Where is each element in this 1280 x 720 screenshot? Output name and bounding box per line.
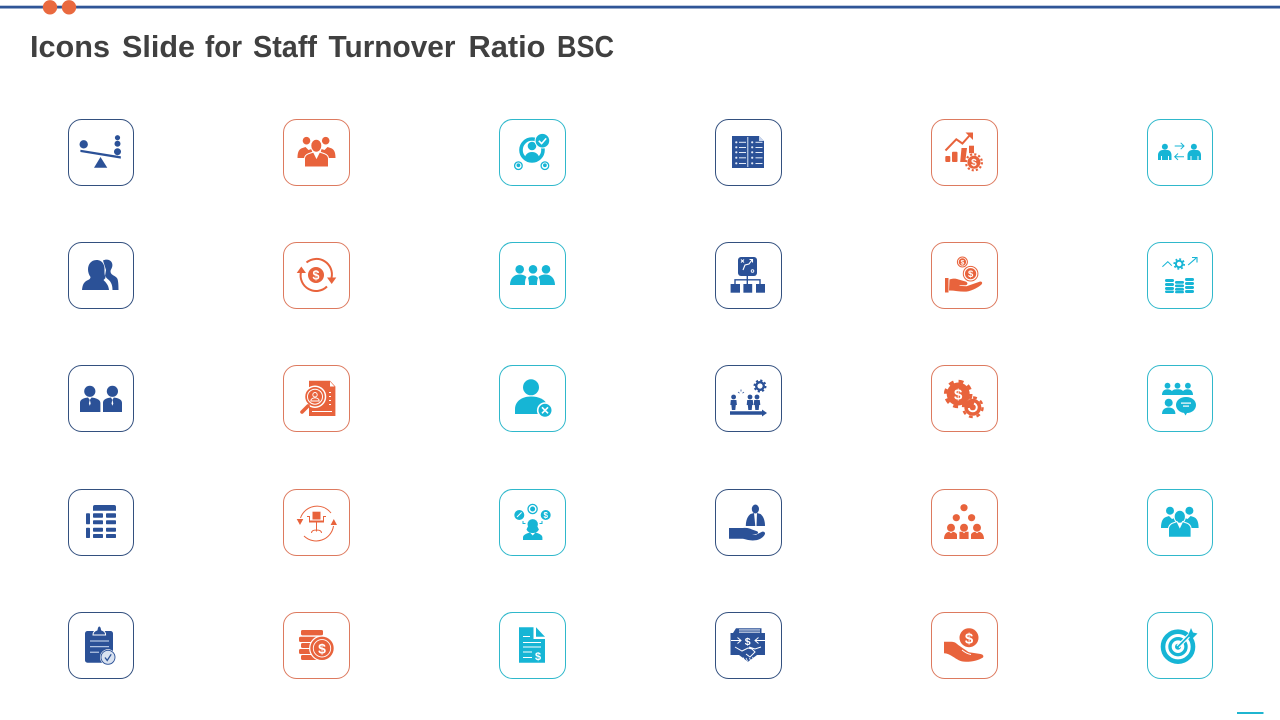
card: chair rotation	[284, 490, 350, 556]
icon: hand receiving coins	[945, 257, 982, 292]
icon: dollar with rotation arrows: $	[313, 268, 320, 282]
page number dash	[1237, 712, 1264, 714]
card: handshake deal	[716, 612, 782, 678]
title: for	[205, 29, 242, 64]
title: Icons	[30, 29, 110, 64]
card: verified network	[500, 120, 566, 186]
card: silhouettes	[68, 242, 134, 308]
title: Staff	[253, 29, 318, 64]
card: strategy hierarchy	[716, 242, 782, 308]
icon: handshake with dollar: $	[745, 636, 751, 648]
icon: growth arrow with bars and gear: $	[971, 158, 977, 169]
icon: coins with dollar: $	[318, 640, 326, 656]
title: Turnover	[328, 29, 456, 64]
icon: people pyramid	[944, 504, 984, 539]
card: invoice document	[500, 612, 566, 678]
icon: two people exchanging	[1158, 143, 1201, 160]
card: growth chart	[932, 120, 998, 186]
icon: people with speech bubble	[1162, 383, 1196, 416]
icon: three people	[510, 265, 555, 285]
card: table rows	[68, 490, 134, 556]
icon: user with cross badge	[515, 379, 552, 418]
title: Slide	[122, 29, 195, 64]
card: process team	[716, 366, 782, 432]
card: balance seesaw	[68, 120, 134, 186]
icon: strategy board over org chart	[731, 257, 765, 293]
card: team orange	[284, 120, 350, 186]
icon: magnifier over résumé	[302, 381, 335, 416]
icon: group of three	[1161, 507, 1199, 537]
icon: office chair with rotation arrows	[297, 506, 337, 541]
icon: verified person network	[515, 133, 550, 170]
card: document list	[716, 120, 782, 186]
icon: hand receiving coins: $	[961, 260, 965, 266]
icon: dollar over open hand: $	[965, 630, 974, 647]
icon: document with dollar: $	[535, 651, 541, 663]
icon: hand receiving coins: $	[968, 269, 974, 280]
icon: team on progress arrow with gear	[730, 380, 767, 416]
card: staff exchange	[1148, 120, 1212, 186]
title: Ratio	[468, 29, 546, 64]
card: hierarchy pyramid	[932, 490, 998, 556]
icon: gear trends over coin stacks	[1162, 258, 1197, 293]
card: two employees	[68, 366, 134, 432]
icon: data table	[86, 505, 116, 538]
card: candidate search	[284, 366, 350, 432]
card: approved clipboard	[68, 612, 134, 678]
icon: team of three	[298, 137, 336, 167]
card: hand with dollar	[932, 612, 998, 678]
card: team discussion	[1148, 366, 1212, 432]
card: hand with coins	[932, 242, 998, 308]
icon: two-column document	[732, 136, 764, 168]
icon: target with arrow	[1163, 628, 1198, 662]
card: finance gears	[932, 366, 998, 432]
card: employee benefits	[500, 490, 566, 556]
card: coin stacks	[284, 612, 350, 678]
title: BSC	[557, 29, 614, 64]
top rule with two dots	[0, 0, 1280, 14]
card: gear and coin stacks	[1148, 242, 1212, 308]
icon: two suited employees	[80, 386, 122, 412]
icon: two dollar gears: $	[954, 386, 963, 404]
card: money rotation	[284, 242, 350, 308]
icon: man and woman silhouettes	[82, 260, 118, 290]
icon: clipboard with check	[85, 626, 116, 665]
card: three people	[500, 242, 566, 308]
icon: hand supporting person	[729, 504, 765, 541]
icon: seesaw	[80, 135, 121, 168]
card: target	[1148, 612, 1212, 678]
card: hand holding employee	[716, 490, 782, 556]
icon: person with benefit bubbles: $	[543, 511, 548, 520]
card: team cyan	[1148, 490, 1212, 556]
card: remove user	[500, 366, 566, 432]
